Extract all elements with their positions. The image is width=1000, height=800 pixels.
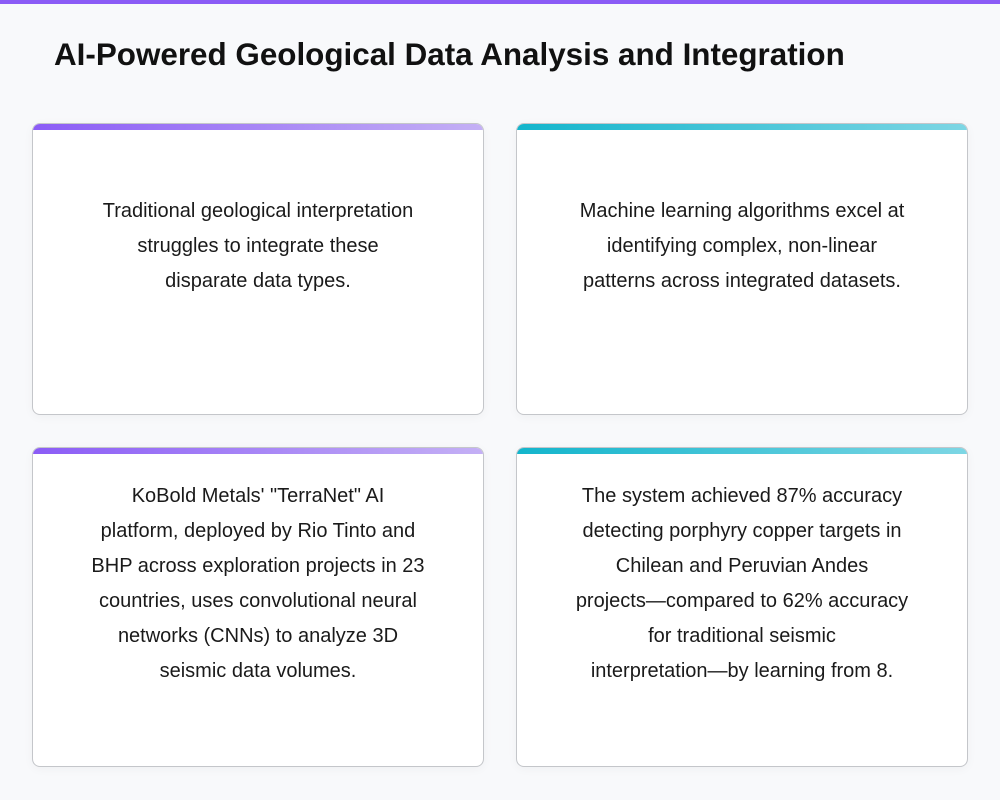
text: machine learning: identifying complex, non-linear (607, 234, 877, 256)
text: machine learning: patterns across integrated datasets. (583, 270, 901, 292)
text: machine learning (580, 200, 904, 292)
text: TerraNet: seismic data volumes. (160, 660, 356, 682)
text: accuracy: The system achieved 87% accuracy (582, 485, 902, 507)
text: accuracy: detecting porphyry copper targets in (582, 520, 902, 542)
text: traditional: Traditional geological interpretation (103, 200, 413, 222)
text: TerraNet: networks (CNNs) to analyze 3D (118, 625, 398, 647)
text: TerraNet: countries, uses convolutional neural (99, 590, 417, 612)
text: machine learning: Machine learning algorithms excel at (580, 200, 904, 222)
panel: traditional interpretation (32, 123, 484, 415)
text: traditional: disparate data types. (165, 270, 351, 292)
text: accuracy: Chilean and Peruvian Andes (616, 555, 868, 577)
text: TerraNet: platform, deployed by Rio Tinto and (101, 520, 415, 542)
top accent bar (0, 0, 1000, 4)
text: traditional: struggles to integrate these (137, 234, 379, 256)
text: traditional (103, 200, 413, 292)
panel: machine learning (516, 123, 968, 415)
text: accuracy: projects—compared to 62% accuracy (576, 590, 908, 612)
text: TerraNet (91, 485, 425, 682)
panel: TerraNet (32, 447, 484, 767)
text: accuracy: for traditional seismic (648, 625, 836, 647)
text: accuracy: interpretation—by learning from 8. (591, 660, 893, 682)
panel: accuracy (516, 447, 968, 767)
text: TerraNet: KoBold Metals' "TerraNet" AI (132, 485, 384, 507)
text: TerraNet: BHP across exploration projects in 23 (91, 555, 425, 577)
text: accuracy (576, 485, 908, 682)
title: AI-Powered Geological Data Analysis and Integration (54, 37, 845, 72)
